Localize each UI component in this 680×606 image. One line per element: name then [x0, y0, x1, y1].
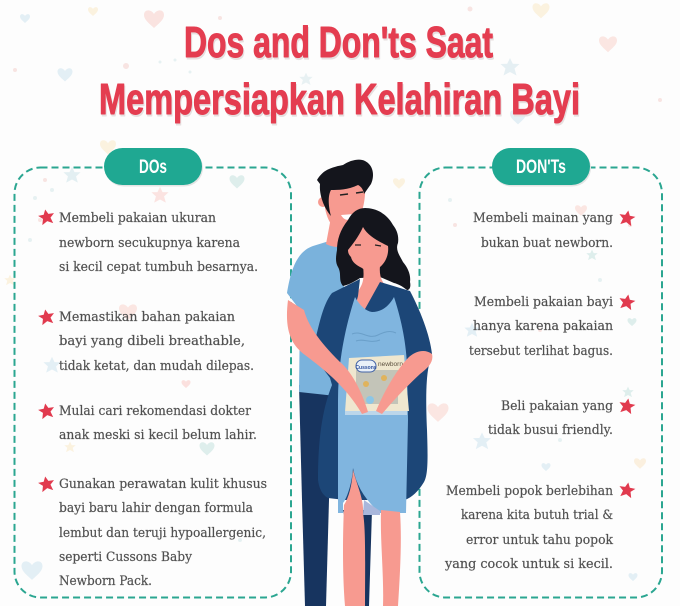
item 1: [37, 208, 258, 275]
woman's hair: [336, 208, 410, 290]
man's shirt: [287, 242, 346, 396]
man's face: [325, 183, 365, 232]
item 4: seperti Cussons Baby: [59, 550, 193, 565]
product box: Cussons: [355, 365, 377, 371]
dress: [338, 297, 408, 513]
item 2: [37, 308, 254, 374]
panel: DOs: [14, 148, 291, 598]
man's trousers: [299, 385, 332, 606]
item 3: tidak busui friendly.: [488, 423, 613, 438]
item 4: Membeli popok berlebihan: [446, 484, 614, 499]
item 3: [488, 397, 636, 438]
item 1: newborn secukupnya karena: [59, 236, 240, 251]
dress fold: [352, 332, 396, 341]
DOs badge: DOs: [139, 157, 167, 178]
woman's face: [348, 227, 388, 271]
item 2: tidak ketat, dan mudah dilepas.: [59, 359, 254, 374]
man's eyes: [340, 192, 363, 195]
item 4: yang cocok untuk si kecil.: [444, 557, 613, 572]
item 3: Mulai cari rekomendasi dokter: [59, 404, 252, 419]
woman's eyes and lips: [355, 245, 381, 246]
illustration: expecting couple: [287, 160, 432, 606]
item 3: anak meski si kecil belum lahir.: [59, 428, 257, 443]
DON'Ts badge: DON'Ts: [516, 157, 566, 178]
item 4: karena kita butuh trial &: [461, 508, 613, 523]
product box: [345, 355, 409, 412]
item 4: [37, 475, 267, 589]
man's forearms and hands: [287, 300, 432, 414]
item 2: Membeli pakaian bayi: [474, 295, 613, 310]
item 1: Membeli mainan yang: [473, 211, 613, 226]
cardigan: [312, 279, 432, 500]
item 4: bayi baru lahir dengan formula: [59, 501, 253, 516]
title: [99, 18, 581, 126]
man's smile: [341, 214, 354, 220]
title: Dos and Don'ts Saat: [184, 18, 493, 67]
skirt fade below box: [345, 411, 407, 415]
item 4: Gunakan perawatan kulit khusus: [59, 477, 267, 492]
item 4: lembut dan teruji hypoallergenic,: [59, 526, 266, 541]
man's back leg: [343, 510, 372, 606]
man's neck: [326, 212, 348, 247]
item 1: Membeli pakaian ukuran: [59, 211, 217, 226]
man's hair: [317, 160, 373, 216]
woman's neck and chest: [355, 266, 394, 311]
item 2: bayi yang dibeli breathable,: [59, 334, 245, 349]
title: Dos and Don'ts Saat: [185, 20, 494, 69]
item 1: [473, 209, 636, 251]
item 1: bukan buat newborn.: [481, 236, 613, 251]
panel: DON'Ts: [420, 148, 662, 598]
woman's legs: [343, 470, 401, 606]
item 3: [37, 402, 257, 443]
item 2: [469, 293, 636, 359]
item 2: tersebut terlihat bagus.: [469, 344, 613, 359]
item 4: [444, 481, 636, 572]
item 4: error untuk tahu popok: [466, 533, 613, 548]
DON'Ts badge: [492, 148, 591, 186]
product box: newborn: [378, 361, 403, 368]
DOs badge: [104, 148, 203, 186]
item 2: Memastikan bahan pakaian: [59, 310, 236, 325]
item 4: Newborn Pack.: [59, 574, 152, 589]
item 1: si kecil cepat tumbuh besarnya.: [59, 260, 258, 275]
item 3: Beli pakaian yang: [501, 399, 613, 414]
dress underskirt: [363, 500, 380, 515]
item 2: hanya karena pakaian: [473, 319, 614, 334]
man's ear: [318, 197, 328, 207]
